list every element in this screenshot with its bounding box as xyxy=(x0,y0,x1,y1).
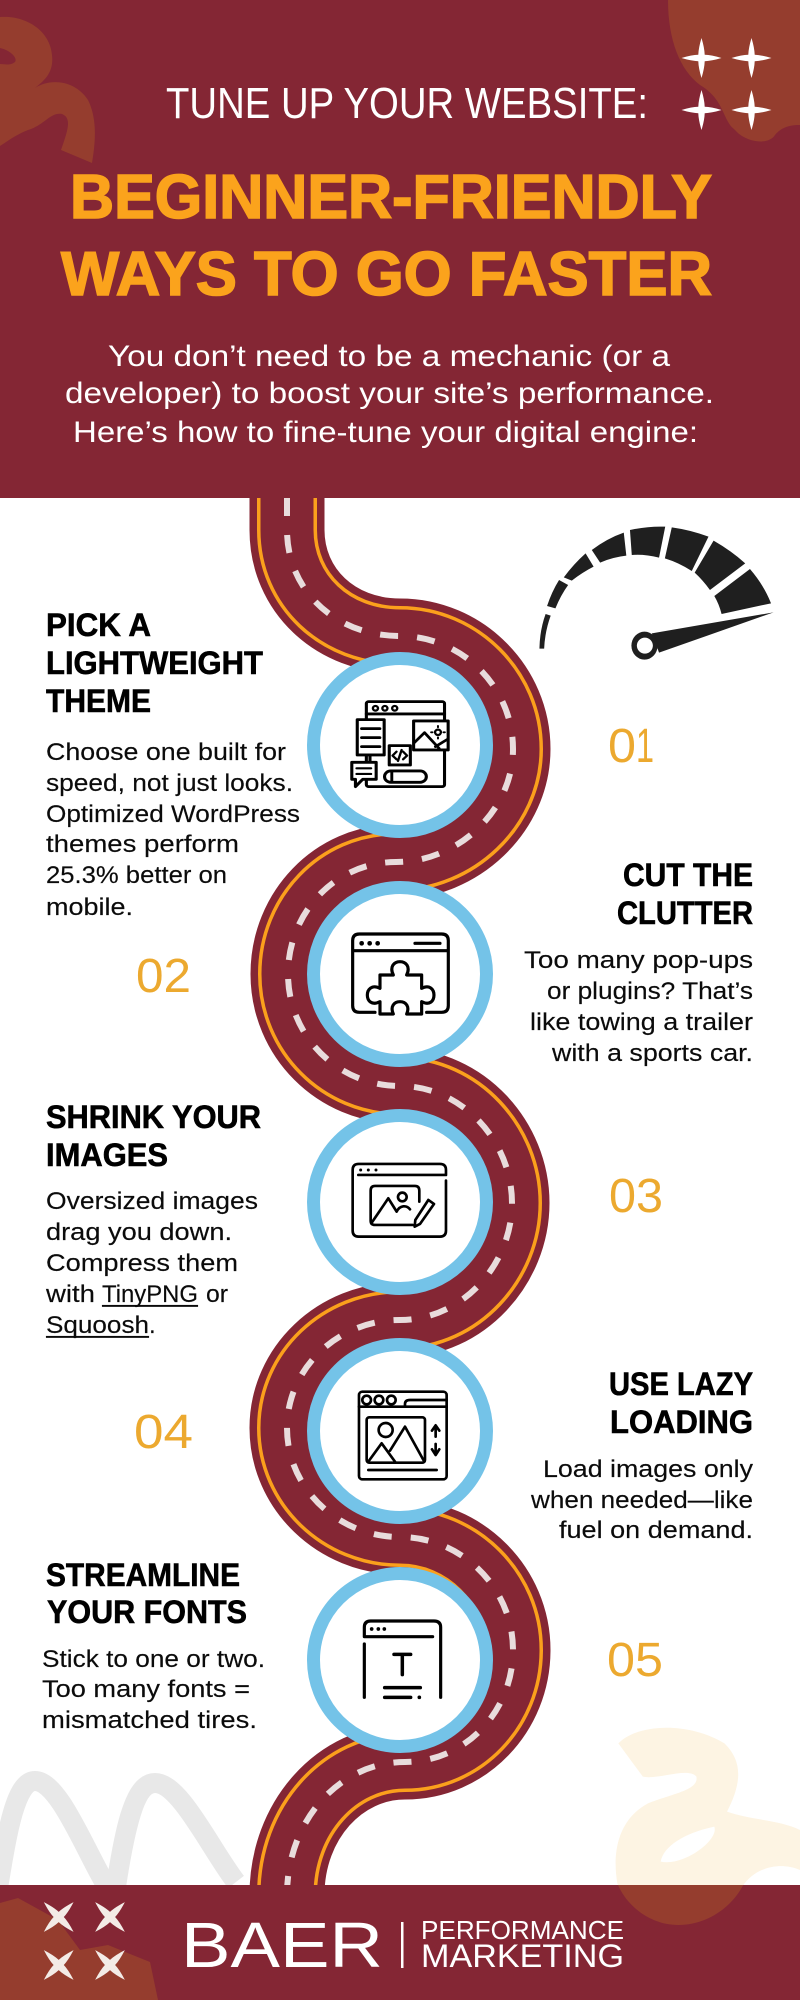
step 1 heading: LIGHTWEIGHT xyxy=(46,645,263,681)
step 1 text: Optimized WordPress xyxy=(46,801,300,828)
step 1 text: themes perform xyxy=(46,831,239,858)
step 3 text: . xyxy=(149,1312,156,1339)
step 3 text: drag you down. xyxy=(46,1219,232,1246)
icon: website layout xyxy=(352,702,448,787)
step 2 heading: CUT THE xyxy=(623,857,753,893)
step 3 heading: IMAGES xyxy=(46,1137,168,1173)
step 4 heading xyxy=(609,1366,753,1440)
decorative cream brush shape xyxy=(616,1728,800,1925)
step 3 circle and icon xyxy=(314,1116,486,1288)
step 4 heading: LOADING xyxy=(610,1404,753,1440)
step 4 text: when needed—like xyxy=(530,1487,753,1514)
gauge needle xyxy=(631,612,774,660)
icon: image edit window xyxy=(353,1164,446,1237)
logo: MARKETING xyxy=(421,1938,624,1974)
decorative brush footer left xyxy=(0,1898,158,2000)
step 2 text xyxy=(524,947,753,1067)
logo xyxy=(181,1909,624,1981)
decorative brush footer right xyxy=(618,1885,744,1925)
icon: plugin puzzle window xyxy=(353,934,448,1014)
icon: lazy loading window xyxy=(359,1392,447,1479)
step 1 heading: THEME xyxy=(46,683,151,719)
step 2 text: Too many pop-ups xyxy=(524,947,753,974)
step 4 text: fuel on demand. xyxy=(559,1517,753,1544)
number 03: 03 xyxy=(609,1170,663,1223)
step 2 heading: CLUTTER xyxy=(617,895,753,931)
step 4 circle and icon xyxy=(314,1344,486,1518)
step 5 text: Too many fonts = xyxy=(42,1676,250,1703)
step 1 circle and icon xyxy=(314,658,486,832)
step 1 heading xyxy=(46,607,263,719)
step 1 heading: PICK A xyxy=(46,607,151,643)
winding road xyxy=(287,498,513,1895)
step 2 circle and icon xyxy=(314,888,486,1060)
panel: footer xyxy=(0,1885,800,2000)
decorative grey squiggle xyxy=(0,1781,236,1900)
step 5 heading: STREAMLINE xyxy=(46,1557,240,1593)
step 5 heading xyxy=(46,1557,247,1630)
intro text: You don’t need to be a mechanic (or a xyxy=(108,340,670,373)
step 3 text: or xyxy=(206,1281,228,1308)
number 02: 02 xyxy=(136,950,191,1003)
intro text: Here’s how to fine-tune your digital engine: xyxy=(73,416,698,449)
icon: crosses xyxy=(29,1887,140,1995)
title kicker: TUNE UP YOUR WEBSITE: xyxy=(166,80,648,128)
step 4 text: Load images only xyxy=(543,1456,753,1483)
intro text xyxy=(65,340,714,449)
logo: PERFORMANCE xyxy=(421,1917,624,1945)
step 1 text: Choose one built for xyxy=(46,739,286,766)
step 3 text: Oversized images xyxy=(46,1188,258,1215)
step 2 text: with a sports car. xyxy=(551,1040,753,1067)
step 3 text xyxy=(45,1188,258,1339)
step 1 text: 25.3% better on xyxy=(46,862,227,889)
step 3 text: Squoosh xyxy=(46,1312,149,1339)
number 01 xyxy=(608,720,654,773)
step 5 text: mismatched tires. xyxy=(42,1707,257,1734)
number 04: 04 xyxy=(134,1406,193,1459)
icon: sparkles xyxy=(682,38,772,130)
number 05: 05 xyxy=(607,1634,663,1687)
number 01: 1 xyxy=(636,720,654,773)
step 5 text xyxy=(42,1646,265,1734)
step 3 text: Compress them xyxy=(46,1250,238,1277)
step 5 circle and icon xyxy=(314,1574,486,1746)
icon: typography window xyxy=(364,1621,441,1699)
step 3 text: TinyPNG xyxy=(102,1281,198,1308)
step 4 heading: USE LAZY xyxy=(609,1366,753,1402)
main title xyxy=(61,162,712,309)
step 1 text: speed, not just looks. xyxy=(46,770,293,797)
logo: BAER xyxy=(181,1909,383,1981)
step 5 heading: YOUR FONTS xyxy=(47,1594,247,1630)
step 2 text: like towing a trailer xyxy=(530,1009,753,1036)
step 5 text: Stick to one or two. xyxy=(42,1646,265,1673)
step 4 text xyxy=(530,1456,753,1544)
decorative brush top right xyxy=(668,0,800,141)
number 01: 0 xyxy=(608,720,636,773)
decorative brush top left xyxy=(0,17,95,163)
step 1 text xyxy=(46,739,300,921)
step 3 heading xyxy=(46,1099,261,1173)
panel: header xyxy=(0,0,800,498)
step 2 heading xyxy=(617,857,753,931)
main title: BEGINNER-FRIENDLY xyxy=(70,162,712,232)
step 1 text: mobile. xyxy=(46,894,133,921)
speedometer gauge xyxy=(539,527,774,660)
step 3 heading: SHRINK YOUR xyxy=(46,1099,261,1135)
step 2 text: or plugins? That’s xyxy=(547,978,753,1005)
step 3 text: with xyxy=(45,1281,95,1308)
main title: WAYS TO GO FASTER xyxy=(61,239,712,309)
intro text: developer) to boost your site’s performance. xyxy=(65,377,714,410)
